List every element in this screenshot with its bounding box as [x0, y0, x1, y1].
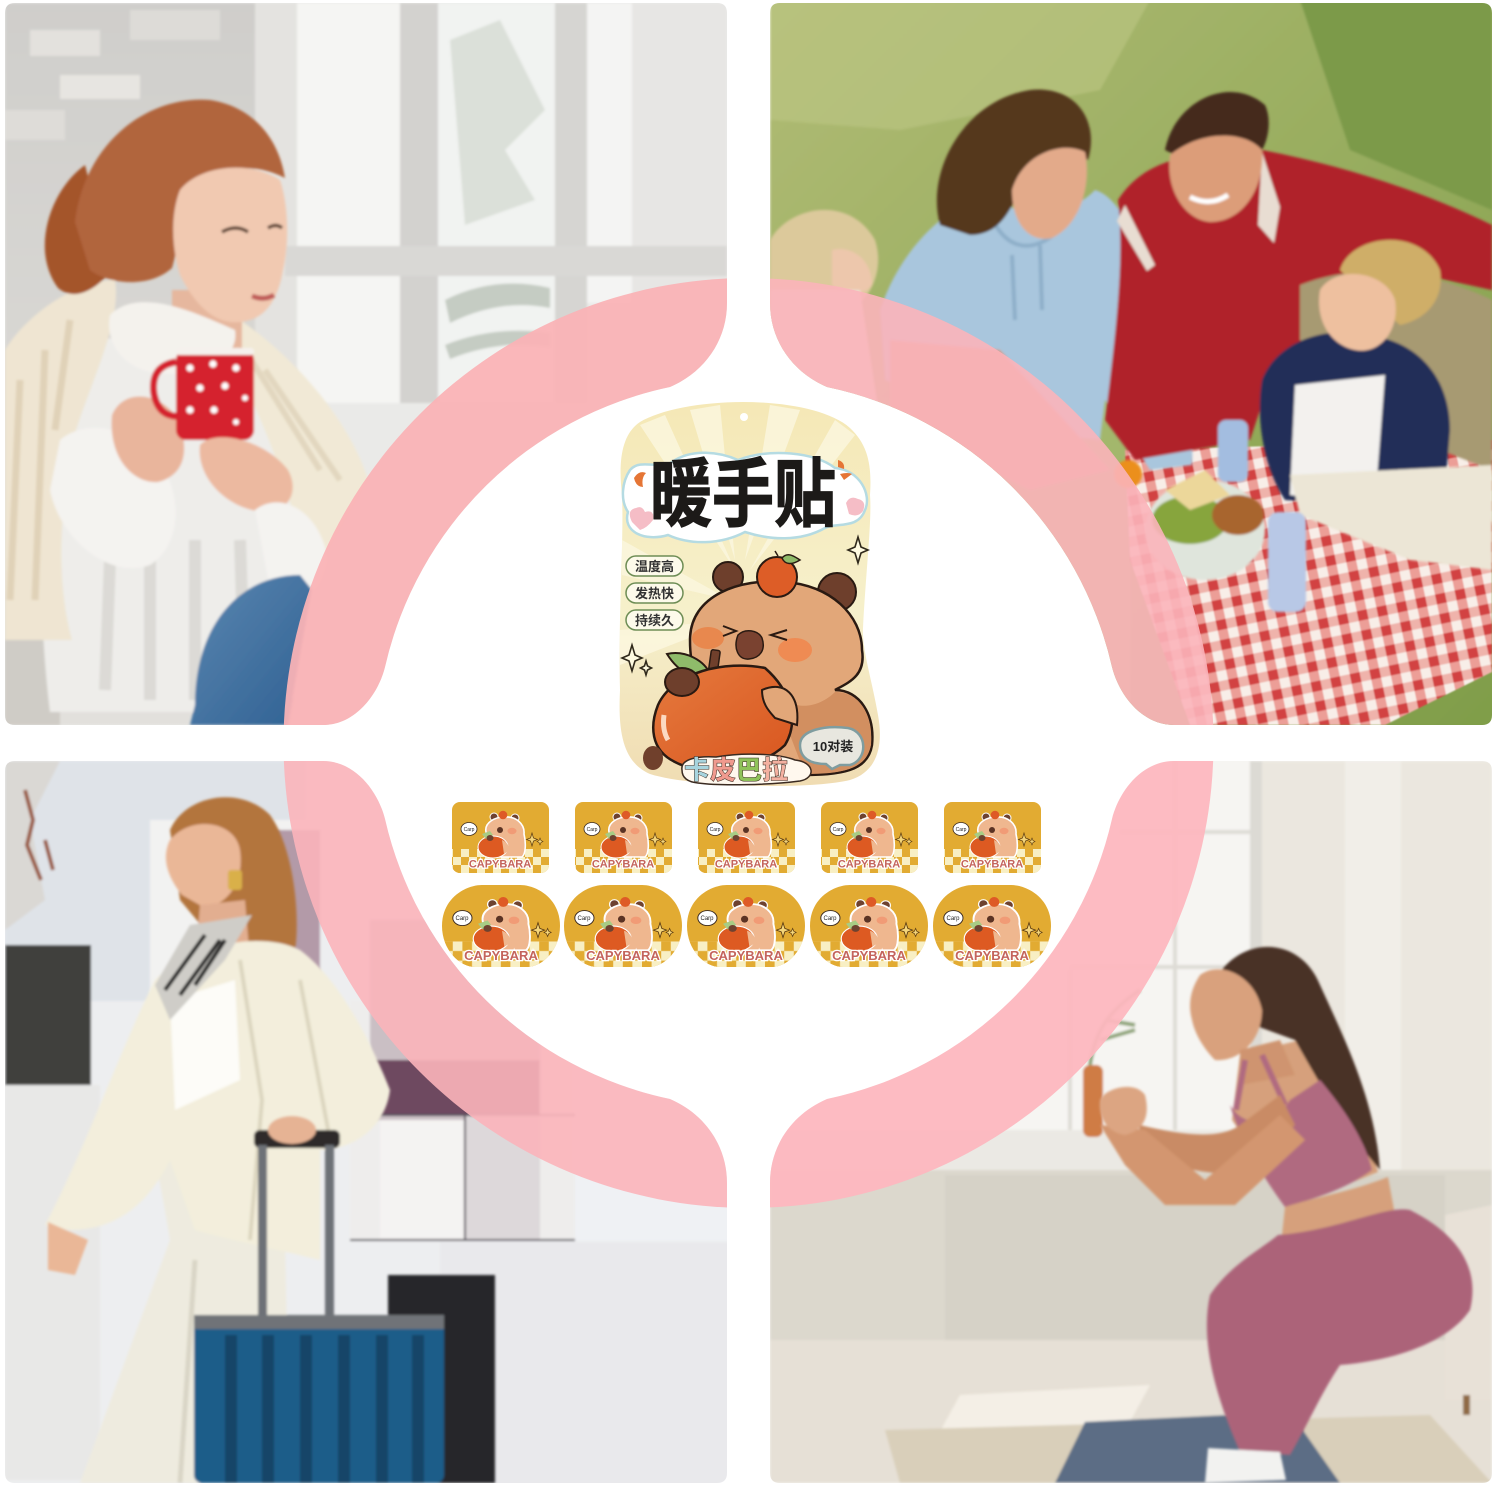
small sticker 5 [944, 802, 1041, 873]
large sticker 3: CAPYBARA [709, 948, 783, 963]
woman [1100, 947, 1472, 1483]
feature pill: 持续久 [626, 610, 683, 630]
ring segment: top-right [770, 278, 1214, 725]
small sticker 1 [452, 802, 549, 873]
small sticker 3: Carp [710, 827, 721, 833]
picnic blanket [1125, 440, 1492, 725]
large sticker 1 [442, 885, 561, 968]
small sticker 4: Carp [833, 827, 844, 833]
mascot: capybara hugging an orange [643, 551, 872, 775]
large sticker 3 [687, 885, 806, 968]
woman [5, 100, 368, 725]
panel: woman travelling with a suitcase [0, 755, 730, 1487]
ring segment: bottom-left [284, 761, 727, 1208]
count badge: 10对装 [800, 727, 863, 769]
sticker row: small warmers [452, 802, 1041, 873]
small sticker 1: Carp [464, 827, 475, 833]
large sticker 3: Carp [700, 916, 714, 922]
large sticker 4: Carp [823, 916, 837, 922]
large sticker 5: Carp [946, 916, 960, 922]
woman walking [45, 797, 495, 1483]
small sticker 5: Carp [956, 827, 967, 833]
sparkles [622, 537, 868, 675]
ring segment: bottom-right [770, 761, 1214, 1208]
small sticker 4: CAPYBARA [838, 858, 900, 870]
feature pill: 发热快: 发热快 [635, 586, 674, 601]
ring segment: top-left [284, 278, 727, 725]
panel: family picnic on the grass [770, 0, 1500, 730]
small sticker 3: CAPYBARA [715, 858, 777, 870]
feature pill: 温度高 [626, 556, 683, 576]
feature pill: 持续久: 持续久 [635, 613, 674, 628]
large sticker 4 [810, 885, 929, 968]
sticker row: large warmers [442, 885, 1052, 968]
small sticker 2: Carp [587, 827, 598, 833]
small sticker 2: CAPYBARA [592, 858, 654, 870]
small sticker 3 [698, 802, 795, 873]
product: hand warmer pouch [620, 402, 880, 787]
large sticker 1: Carp [455, 916, 469, 922]
large sticker 2: CAPYBARA [586, 948, 660, 963]
large sticker 4: CAPYBARA [832, 948, 906, 963]
small sticker 2 [575, 802, 672, 873]
panel: woman with a mug by the window [0, 0, 730, 730]
small sticker 5: CAPYBARA [961, 858, 1023, 870]
sun rays [620, 405, 855, 665]
feature pill: 发热快 [626, 583, 683, 603]
count badge: 10对装: 10对装 [813, 739, 853, 754]
panel: woman squatting at home [765, 755, 1500, 1487]
large sticker 2 [564, 885, 683, 968]
family [770, 90, 1492, 612]
large sticker 5 [933, 885, 1052, 968]
large sticker 1: CAPYBARA [464, 948, 538, 963]
brand logo: 卡皮巴拉: 卡皮巴拉 [684, 750, 788, 787]
large sticker 5: CAPYBARA [955, 948, 1029, 963]
large sticker 2: Carp [577, 916, 591, 922]
title: 暖手贴: 暖手贴 [650, 434, 836, 542]
small sticker 1: CAPYBARA [469, 858, 531, 870]
feature pill: 温度高: 温度高 [635, 559, 674, 574]
small sticker 4 [821, 802, 918, 873]
